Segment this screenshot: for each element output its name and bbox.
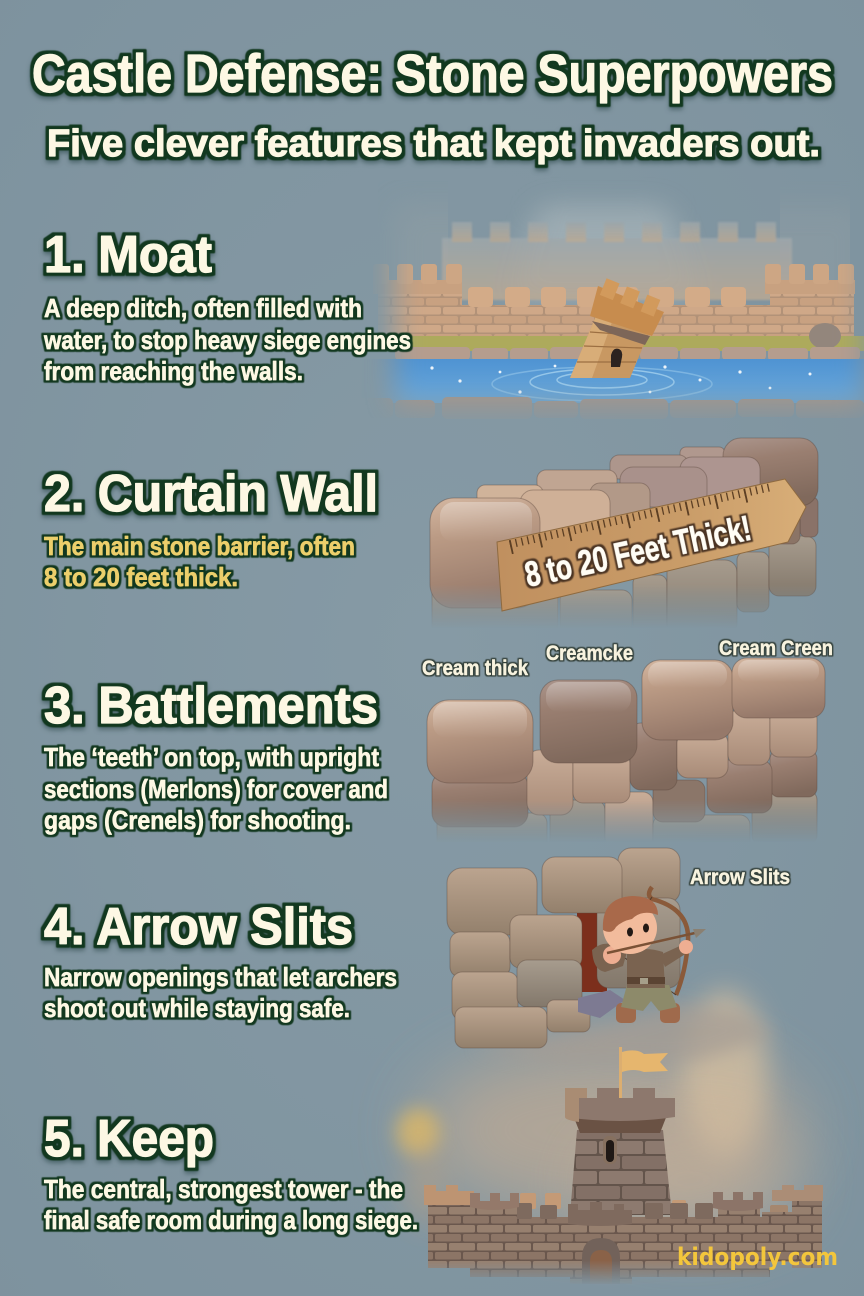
heading: 3. Battlements: 3. Battlements (44, 677, 378, 735)
text: battlements description: sections (Merlons) for cover and (44, 774, 388, 804)
text: battlements description: The ‘teeth’ on top, with upright (44, 742, 379, 772)
back merlons (520, 1193, 686, 1209)
text: curtain wall description: 8 to 20 feet thick. (44, 562, 238, 592)
water (360, 359, 864, 403)
icon: archer (592, 887, 706, 1023)
panel: moat illustration (379, 199, 864, 416)
stone rim (395, 347, 860, 359)
text: keep description (44, 1174, 418, 1235)
text: moat description: from reaching the walls. (44, 356, 303, 386)
text: moat description: A deep ditch, often filled with (44, 293, 362, 323)
ground (470, 1004, 775, 1062)
heading: 4. Arrow Slits: 4. Arrow Slits (44, 898, 353, 956)
label: Cream thick: Cream thick (422, 657, 528, 680)
stone merlon 3 (642, 660, 733, 740)
stone merlon 2 (540, 680, 637, 763)
text: arrow slits description: shoot out while staying safe. (44, 993, 350, 1023)
text: keep description: The central, strongest tower - the (44, 1174, 403, 1204)
stone merlon 4 (732, 658, 825, 718)
wall with merlons (460, 287, 770, 339)
text: curtain wall description: The main stone barrier, often (44, 531, 355, 561)
central tower (565, 1088, 675, 1215)
label: Cream Creen: Cream Creen (719, 637, 833, 660)
label: Arrow Slits: Arrow Slits (690, 866, 790, 889)
label: Creamcke: Creamcke (546, 642, 633, 665)
ruler label: 8 to 20 Feet Thick! (522, 509, 755, 595)
bottom stone edge (382, 397, 864, 416)
panel: keep illustration (424, 1047, 823, 1284)
warm glow behind keep (396, 990, 800, 1230)
grass bank (395, 336, 864, 351)
curtain wall (470, 1217, 770, 1277)
ruler sign (497, 479, 806, 611)
brand: kidopoly.com: kidopoly.com (677, 1243, 838, 1271)
left tower (379, 264, 462, 336)
text: curtain wall description (44, 531, 355, 592)
text: arrow slits description (44, 962, 397, 1023)
right tower (765, 264, 855, 342)
icon: sinking tower (570, 278, 664, 378)
flag (619, 1047, 668, 1102)
text: moat description (43, 293, 411, 386)
stone wall (447, 848, 680, 1048)
panel: battlements illustration (427, 658, 825, 855)
stone merlon 1 (427, 700, 533, 783)
text: keep description: final safe room during a long siege. (44, 1205, 418, 1235)
heading: 1. Moat: 1. Moat (44, 226, 212, 284)
text: moat description: water, to stop heavy siege engines (43, 325, 411, 355)
text: arrow slits description: Narrow openings that let archers (44, 962, 397, 992)
heading: 2. Curtain Wall: 2. Curtain Wall (44, 465, 378, 523)
text: battlements description (44, 742, 388, 835)
panel: arrow slits illustration (447, 848, 775, 1062)
towers (424, 1185, 823, 1273)
panel: curtain wall illustration (430, 438, 818, 645)
text: battlements description: gaps (Crenels) for shooting. (44, 805, 351, 835)
gatehouse (568, 1202, 632, 1284)
subtitle: Five clever features that kept invaders out. (47, 123, 820, 165)
heading: 5. Keep: 5. Keep (44, 1110, 214, 1168)
